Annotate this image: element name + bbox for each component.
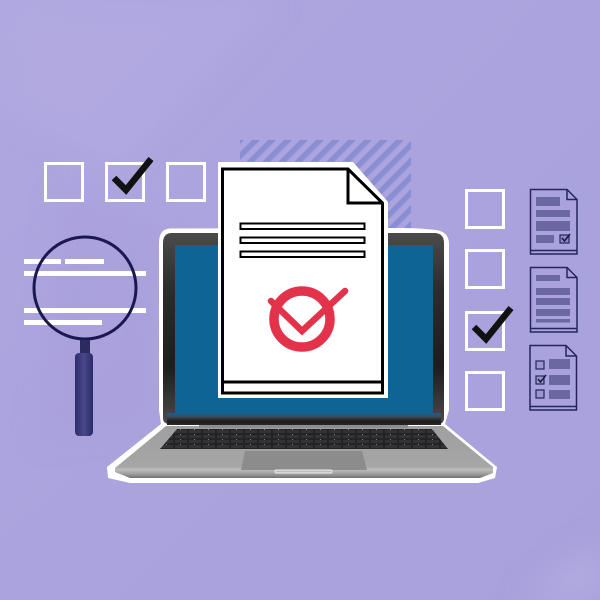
small document 3 [530,346,577,410]
check mark right [474,308,511,339]
document [218,162,388,398]
document bottom band [222,380,383,384]
laptop lid [163,233,444,424]
document sheet [222,169,382,393]
laptop notch [275,470,332,473]
laptop screen [175,245,433,413]
checkbox empty [466,190,504,228]
checkbox empty [46,164,82,200]
right column of checkboxes [466,190,504,410]
trackpad [241,451,367,470]
checkbox checked [466,312,504,350]
magnified text lines [24,259,146,325]
top row of checkboxes [46,164,204,200]
red check logo [271,291,345,347]
page fold [348,169,382,203]
checkbox empty [466,250,504,288]
magnifying glass [34,237,136,436]
hatched rectangle [240,140,411,230]
laptop [107,228,497,483]
document text lines [240,224,364,257]
document white outline [218,162,388,398]
small document 2 [530,268,577,332]
keyboard [160,429,448,449]
checkbox checked [106,164,144,200]
checkbox empty [168,164,204,200]
checkbox empty [466,372,504,410]
laptop base [115,426,493,478]
small document 1 [530,190,577,254]
check mark top [114,159,151,190]
laptop white outline [107,228,497,483]
